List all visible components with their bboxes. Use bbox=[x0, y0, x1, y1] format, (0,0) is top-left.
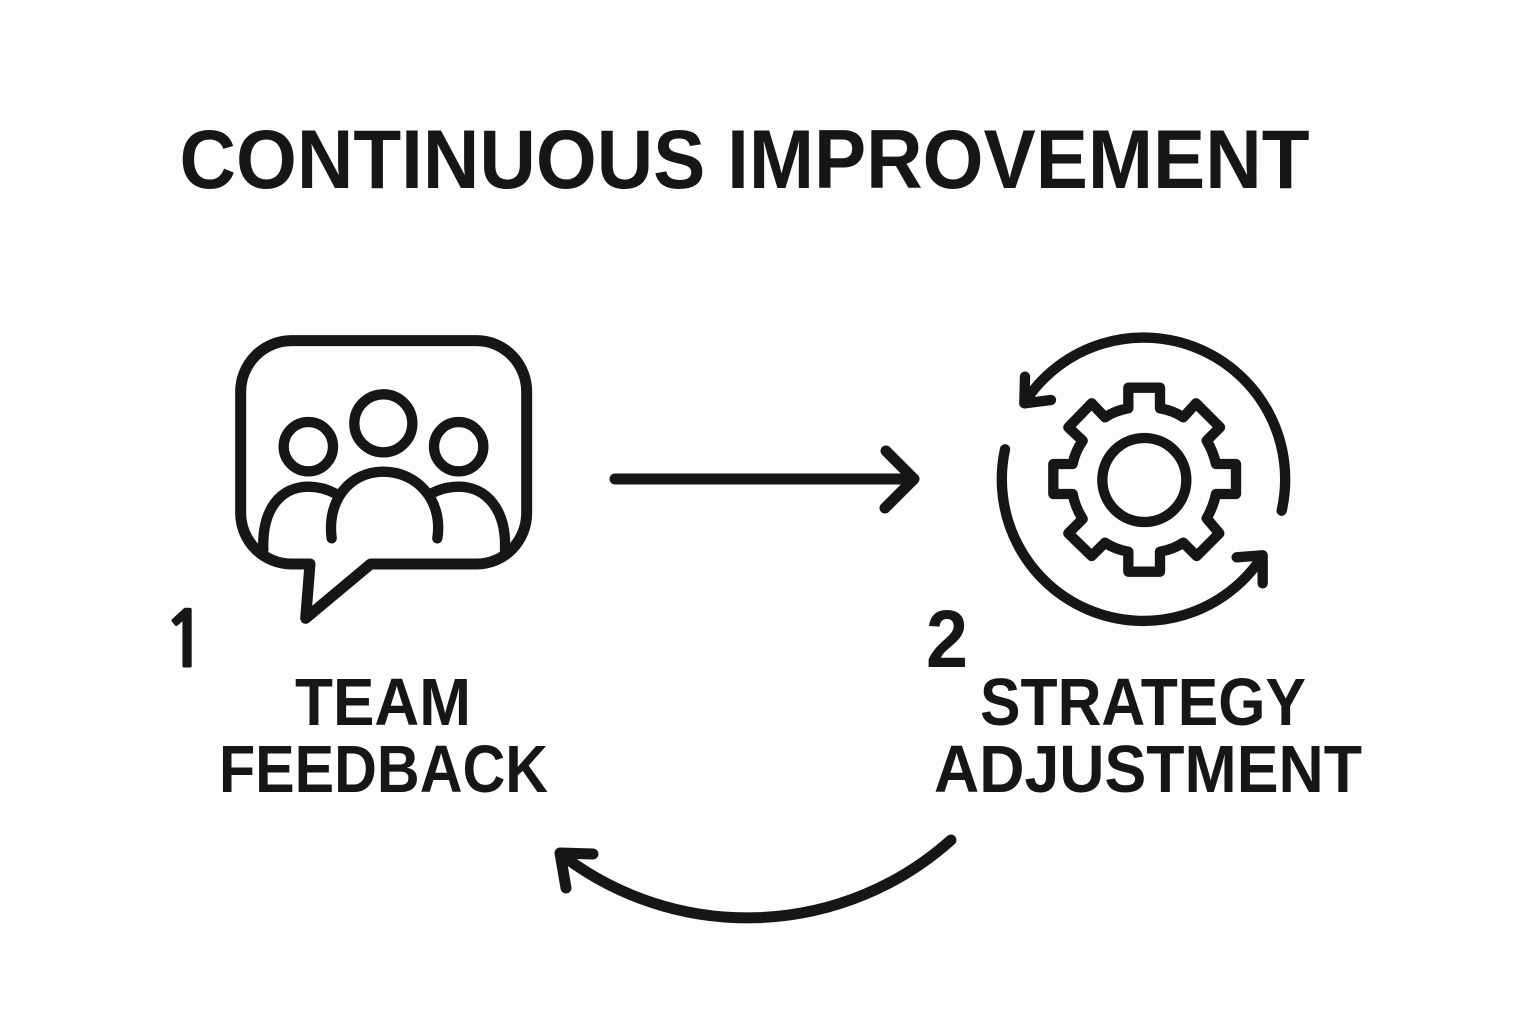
person: left bbox=[263, 422, 335, 550]
step number 2: 2 bbox=[926, 594, 968, 685]
label: team feedback: TEAM bbox=[295, 665, 471, 740]
icon: speech bubble with three people bbox=[241, 341, 527, 618]
arrow: feedback to strategy bbox=[615, 451, 914, 508]
gear hub bbox=[1102, 438, 1186, 522]
circular arrow: bottom bbox=[1002, 449, 1263, 621]
label: strategy adjustment: STRATEGY bbox=[980, 665, 1306, 740]
person: right bbox=[432, 422, 505, 550]
speech bubble outline bbox=[241, 341, 527, 618]
gear outline bbox=[1053, 388, 1236, 572]
step number 1: 1 bbox=[162, 603, 209, 679]
label: strategy adjustment bbox=[934, 665, 1362, 807]
label: strategy adjustment: ADJUSTMENT bbox=[934, 732, 1362, 807]
person: center bbox=[331, 394, 438, 538]
icon: gear with circular arrows bbox=[1002, 338, 1285, 621]
label: team feedback: FEEDBACK bbox=[219, 732, 548, 807]
title: CONTINUOUS IMPROVEMENT bbox=[180, 112, 1310, 206]
panel: team feedback bbox=[162, 341, 548, 807]
circular arrow: top bbox=[1024, 338, 1285, 511]
panel: strategy adjustment bbox=[926, 338, 1362, 807]
arrow: strategy back to feedback bbox=[560, 840, 951, 918]
label: team feedback bbox=[219, 665, 548, 807]
